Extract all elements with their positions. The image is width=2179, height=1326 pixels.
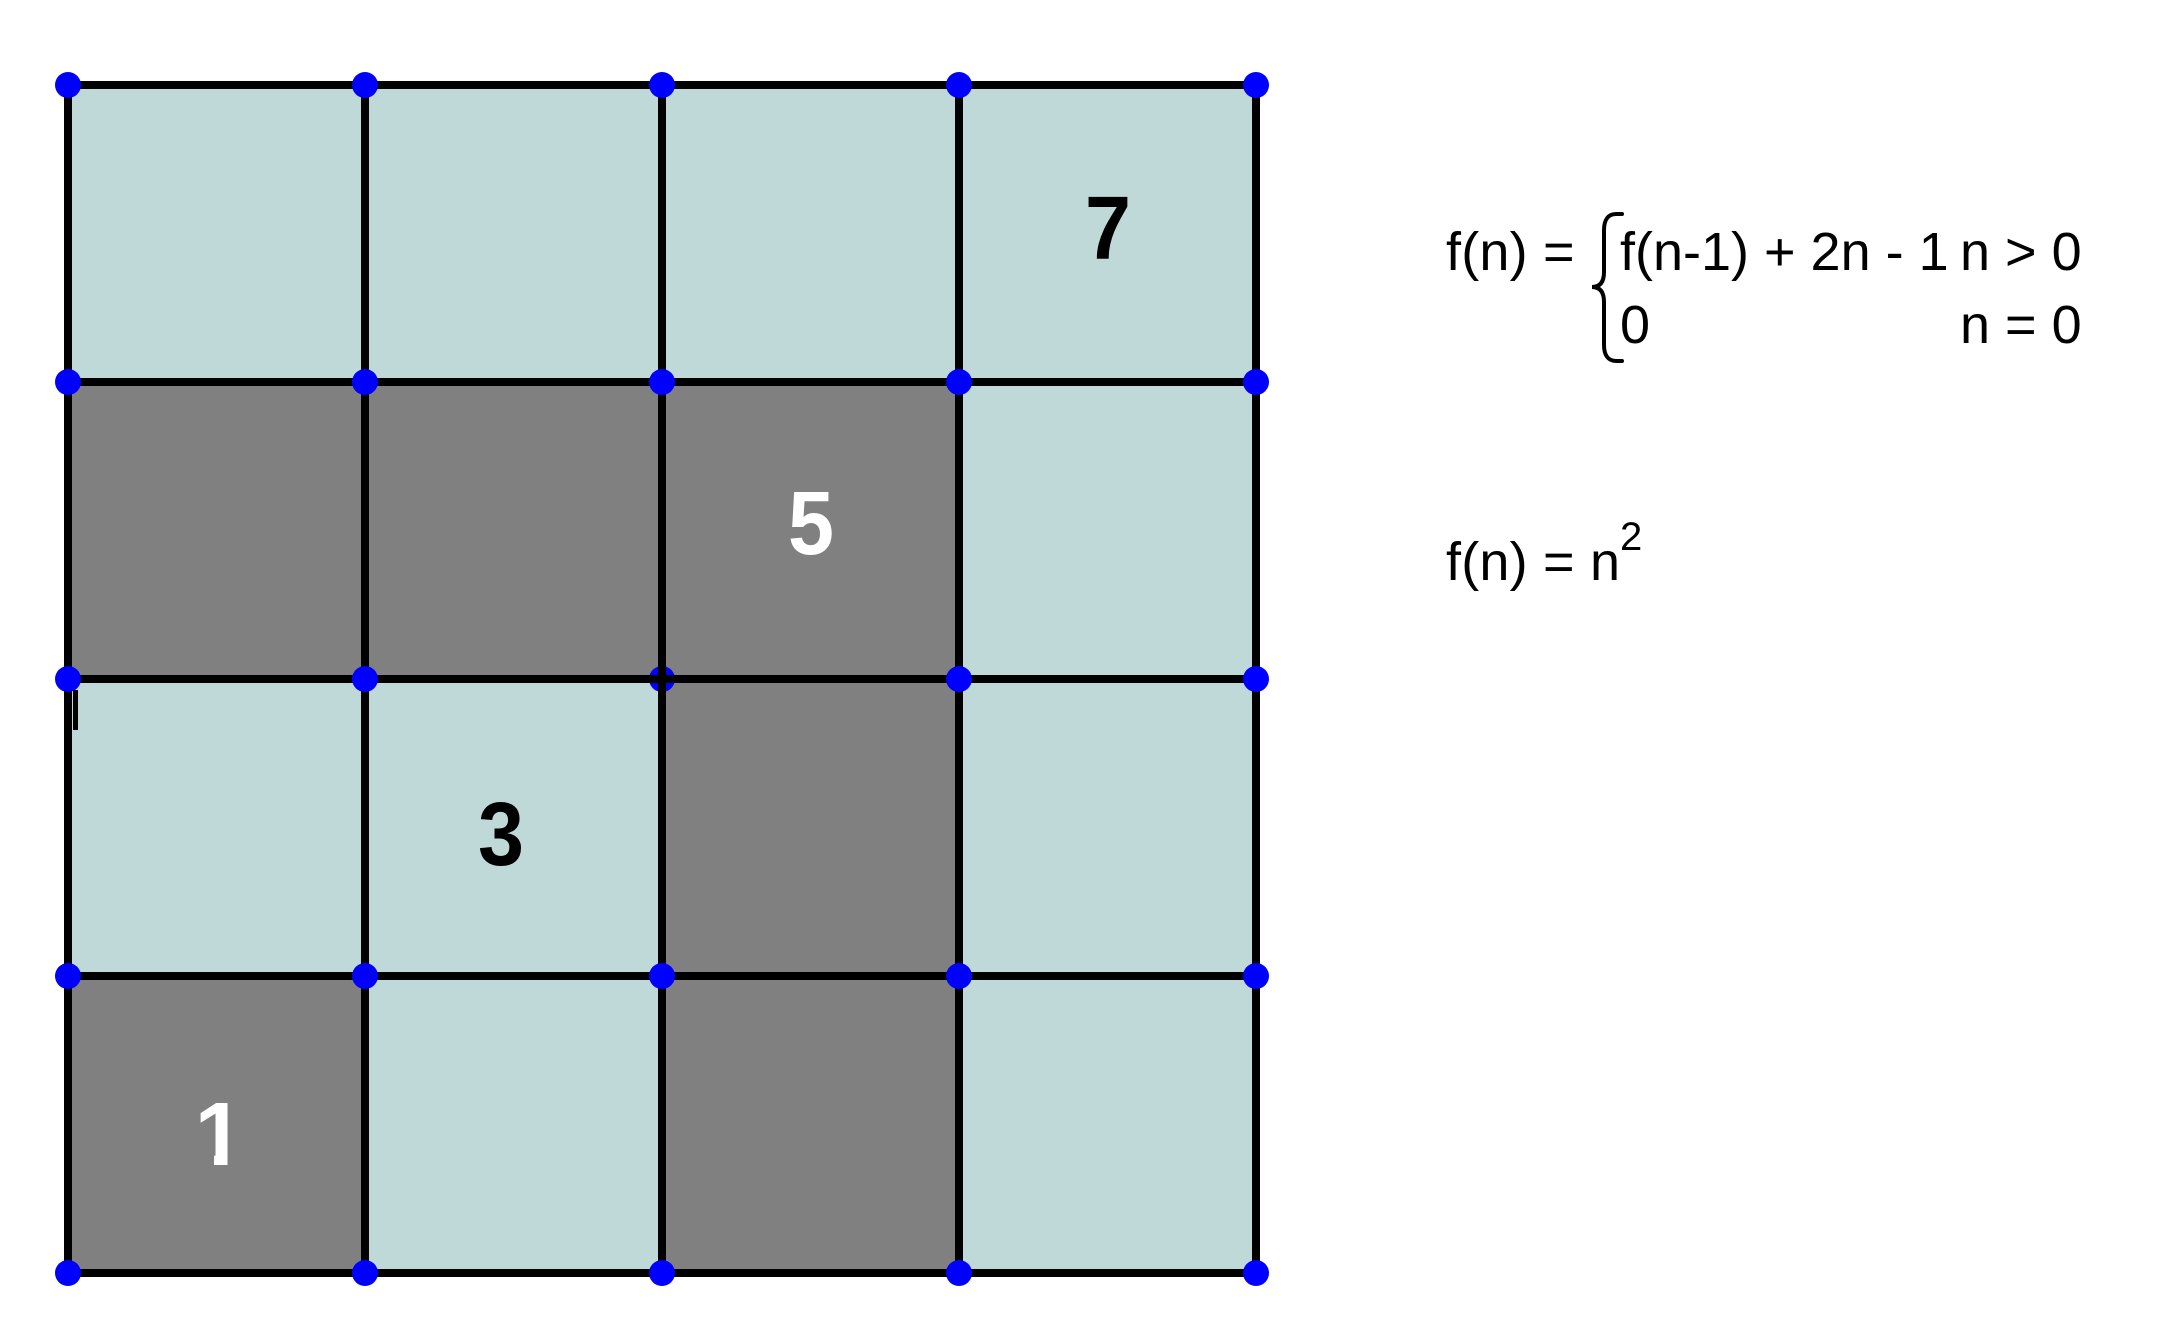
number 3: 3 (478, 785, 524, 885)
panel: gray L-shaped cells (5) (68, 382, 959, 1273)
brace (1592, 214, 1622, 361)
blue grid nodes (55, 72, 1269, 1286)
case 1 expression: f(n-1) + 2n - 1 (1620, 222, 1949, 282)
grid of squares (55, 72, 1269, 1286)
panel: light cells (68, 85, 1256, 1273)
blue node under grid lines (649, 666, 675, 692)
grid lines (64, 85, 1260, 1273)
formula label f(n) =: f(n) = (1446, 222, 1574, 282)
text cursor mark (73, 690, 78, 730)
recursive formula (1446, 214, 2082, 361)
panel: gray cell (1) (68, 976, 365, 1273)
case 1 condition: n > 0 (1960, 222, 2082, 282)
number 1: 1 (194, 1085, 245, 1185)
closed form formula (1446, 515, 1642, 592)
number 7: 7 (1085, 179, 1131, 279)
number 5: 5 (788, 474, 834, 574)
formula text: f(n) = n (1446, 532, 1620, 592)
case 2 value: 0 (1620, 295, 1650, 355)
superscript 2: 2 (1620, 515, 1642, 559)
case 2 condition: n = 0 (1960, 295, 2082, 355)
